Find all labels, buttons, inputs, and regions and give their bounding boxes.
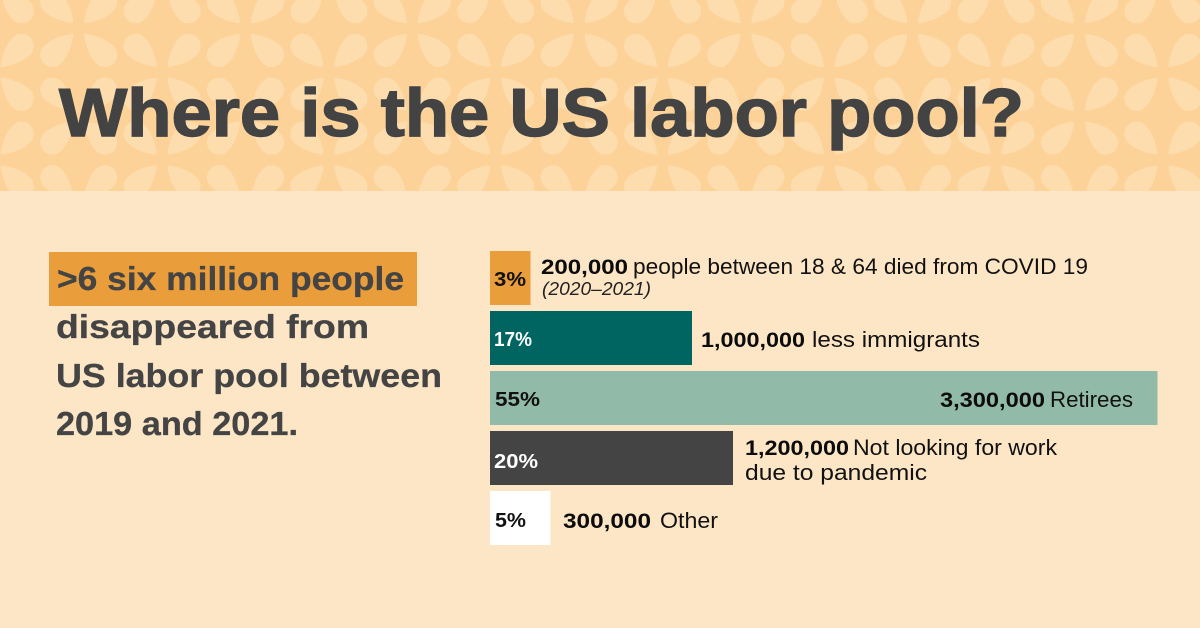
statement continued: disappeared from [56, 308, 369, 345]
bar: retirees 55%: 55% [495, 389, 540, 411]
bar: not looking for work 20%: Not looking for work [853, 435, 1058, 460]
bar: not looking for work 20%: 20% [494, 451, 538, 473]
bar: not looking for work 20%: 1,200,000 [745, 437, 849, 460]
bar: retirees 55%: 3,300,000 [940, 389, 1045, 412]
page background below header [0, 191, 1200, 628]
bar: COVID deaths 3%: (2020–2021) [542, 279, 651, 299]
bar: COVID deaths 3%: 3% [494, 269, 526, 291]
bar: retirees 55%: Retirees [1050, 387, 1133, 412]
bar: other 5% [490, 491, 718, 545]
bar: fewer immigrants 17%: 1,000,000 [701, 329, 805, 352]
statement continued [56, 308, 442, 442]
bar: COVID deaths 3% [490, 251, 1088, 305]
bar: fewer immigrants 17% [490, 311, 980, 365]
bar: other 5%: Other [660, 508, 718, 533]
bar: COVID deaths 3%: 200,000 [541, 256, 628, 279]
title: Where is the US labor pool? [59, 75, 1024, 151]
bar: not looking for work 20%: due to pandemic [745, 460, 927, 485]
bar: not looking for work 20% [490, 431, 1058, 485]
highlight box [49, 252, 417, 306]
bar: fewer immigrants 17%: less immigrants [812, 327, 980, 352]
highlighted statement: >6 six million people [57, 260, 404, 297]
bar: retirees 55% [490, 371, 1158, 425]
bar: fewer immigrants 17%: 17% [494, 329, 532, 351]
bar: COVID deaths 3%: people between 18 & 64 died from COVID 19 [633, 254, 1088, 279]
bar chart: labor pool breakdown [490, 251, 1158, 545]
header band with petal pattern [0, 0, 1200, 242]
statement continued: 2019 and 2021. [56, 405, 298, 442]
bar: other 5%: 300,000 [563, 510, 651, 533]
statement continued: US labor pool between [56, 357, 442, 394]
bar: other 5%: 5% [495, 510, 526, 532]
left text block: summary [49, 252, 442, 442]
